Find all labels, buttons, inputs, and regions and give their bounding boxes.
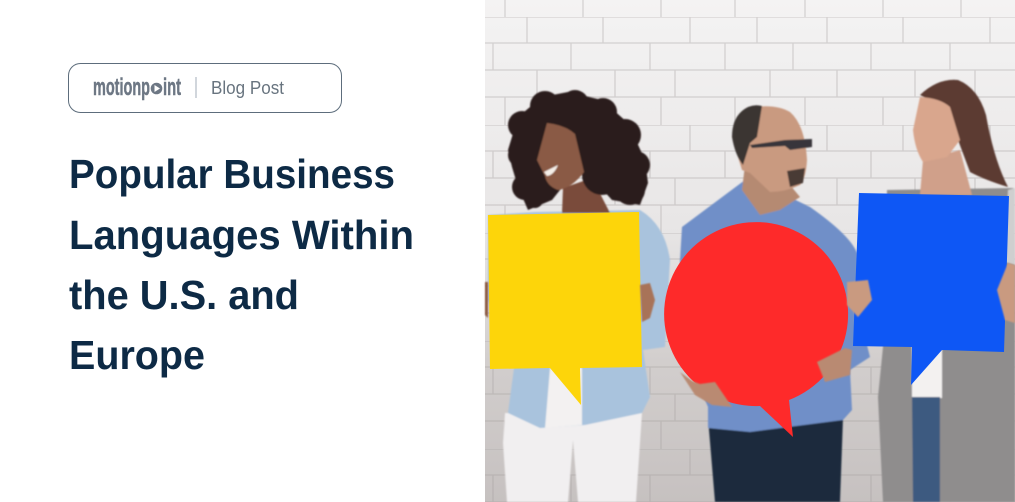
title: Popular Business	[69, 151, 395, 197]
logo: motionpoint wordmark: motionp	[93, 74, 150, 101]
title: Europe	[69, 332, 205, 378]
title: Languages Within	[69, 212, 414, 258]
left white panel	[0, 0, 485, 502]
brick wall background	[485, 0, 1015, 502]
curly hair	[508, 90, 650, 210]
hands holding the bubbles	[485, 263, 1015, 407]
speech bubble: red round	[664, 222, 848, 437]
badge: MotionPoint Blog Post	[68, 64, 342, 112]
title: the U.S. and	[69, 272, 299, 318]
speech bubble: blue square	[853, 193, 1009, 385]
photo: three people holding speech bubbles	[485, 0, 1015, 502]
divider	[196, 77, 197, 98]
label: Blog Post: Blog Post	[211, 78, 284, 98]
speech bubble: yellow square	[488, 212, 642, 405]
person: woman with curly hair	[488, 90, 670, 502]
person: woman with long brown hair	[878, 80, 1015, 502]
person: man with glasses	[680, 105, 870, 502]
title	[69, 151, 414, 378]
logo: motionpoint wordmark: int	[163, 74, 181, 101]
